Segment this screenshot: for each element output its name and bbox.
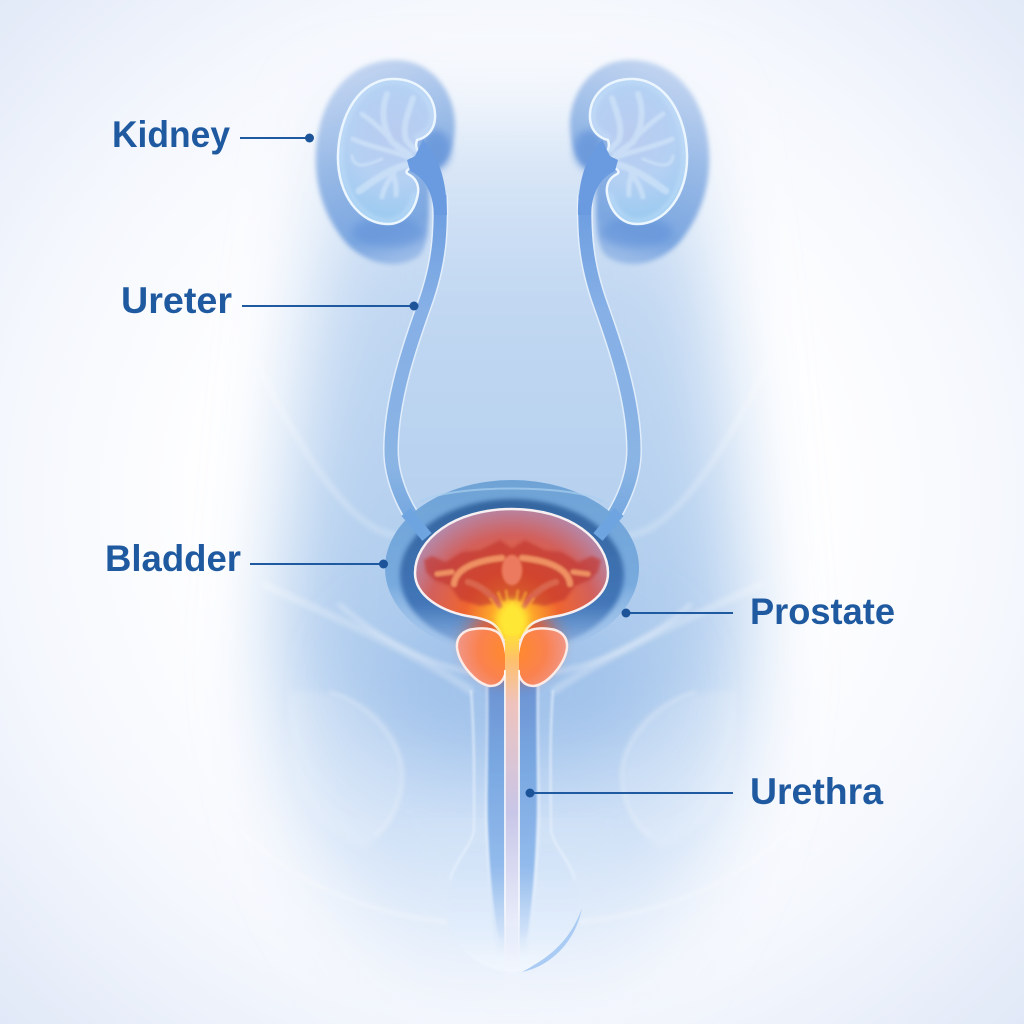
bladder inner tissue bbox=[424, 540, 601, 628]
right kidney bbox=[570, 60, 709, 264]
label: Ureter bbox=[121, 280, 418, 321]
label: Kidney: Kidney bbox=[112, 114, 230, 155]
pelvic soft tissue strands bbox=[240, 360, 790, 922]
left prostate lobe bbox=[457, 628, 507, 686]
label: Bladder: Bladder bbox=[105, 538, 241, 579]
bright centre bbox=[498, 600, 527, 640]
label: Urethra: Urethra bbox=[750, 771, 883, 812]
outer kidney capsule bbox=[316, 60, 455, 264]
central blue haze bbox=[279, 110, 746, 985]
bright rays bbox=[490, 590, 534, 628]
lower tract: tubes and scrotal outline bbox=[448, 670, 582, 972]
tube highlights bbox=[450, 680, 575, 945]
scrotal form bbox=[448, 845, 577, 972]
right prostate lobe bbox=[517, 628, 567, 686]
left kidney bbox=[316, 60, 455, 264]
label: Kidney bbox=[112, 114, 314, 155]
ureter entry segments bbox=[406, 512, 619, 537]
label: Bladder bbox=[105, 538, 388, 579]
inner kidney bbox=[338, 79, 435, 224]
renal calyces bbox=[352, 94, 415, 197]
inner rim glow bbox=[341, 82, 432, 221]
urethra bbox=[504, 636, 520, 994]
crescent bbox=[522, 908, 582, 972]
bladder bbox=[415, 509, 608, 640]
label: Prostate: Prostate bbox=[750, 591, 895, 632]
label: Urethra bbox=[526, 771, 883, 812]
right ureter bbox=[578, 140, 634, 535]
label: Ureter: Ureter bbox=[121, 280, 232, 321]
label: Prostate bbox=[622, 591, 895, 632]
urethra glow bbox=[468, 606, 556, 678]
soft thigh shapes bbox=[288, 690, 737, 850]
dark bands beside urethra bbox=[487, 670, 537, 962]
bladder outer wall bbox=[385, 480, 639, 656]
left ureter bbox=[391, 140, 447, 535]
lower shadow bbox=[352, 217, 424, 247]
hilum shadow bbox=[421, 130, 451, 170]
